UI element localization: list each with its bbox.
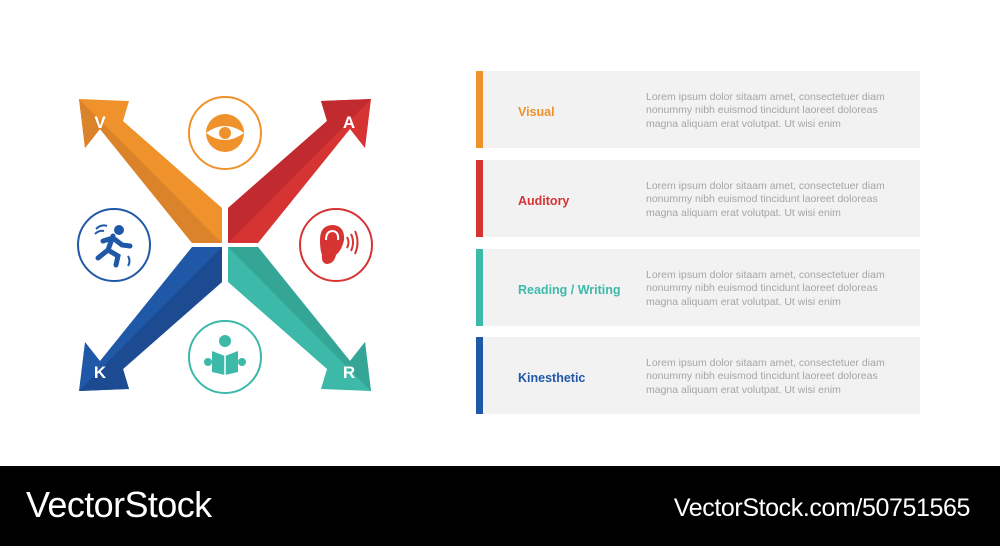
arrow: A red: A: [343, 113, 355, 132]
icon: ear: [300, 209, 372, 281]
arrow: K blue: [79, 247, 222, 391]
panel: Kinesthetic: [476, 337, 920, 414]
panel: Kinesthetic: Lorem ipsum dolor sitaam amet, consectetuer diam nonummy nibh euismod tincidunt laoreet doloreas magna aliquam erat volutpat. Ut wisi enim: [646, 357, 885, 396]
panel: Auditory: [476, 160, 920, 237]
panel: Visual: Lorem ipsum dolor sitaam amet, consectetuer diam nonummy nibh euismod tincidunt laoreet doloreas magna aliquam erat volutpat. Ut wisi enim: [646, 91, 885, 130]
icon: runner: [78, 209, 150, 281]
panel: Visual: Visual: [518, 105, 555, 119]
arrow: A red: [228, 99, 371, 243]
arrow: R teal: R: [343, 363, 355, 382]
footer url: VectorStock.com/50751565: [674, 494, 970, 522]
arrow: K blue: K: [94, 363, 107, 382]
footer logo: VectorStock: [26, 484, 212, 525]
icon: eye: [189, 97, 261, 169]
panel: Reading / Writing: Reading / Writing: [518, 283, 621, 297]
panel: Auditory: Lorem ipsum dolor sitaam amet, consectetuer diam nonummy nibh euismod tincidunt laoreet doloreas magna aliquam erat volutpat. Ut wisi enim: [646, 180, 885, 219]
arrow: V orange: [79, 99, 222, 243]
footer: [0, 466, 1000, 546]
arrow: R teal: [228, 247, 371, 391]
panel: Reading / Writing: [476, 249, 920, 326]
panel: Auditory: Auditory: [518, 194, 569, 208]
arrow: V orange: V: [94, 113, 106, 132]
diagram: VARK arrows: [77, 96, 373, 394]
panel: Kinesthetic: Kinesthetic: [518, 371, 585, 385]
panel: Visual: [476, 71, 920, 148]
panel: Reading / Writing: Lorem ipsum dolor sitaam amet, consectetuer diam nonummy nibh euismod tincidunt laoreet doloreas magna aliquam erat volutpat. Ut wisi enim: [646, 269, 885, 308]
icon: reader: [189, 321, 261, 393]
